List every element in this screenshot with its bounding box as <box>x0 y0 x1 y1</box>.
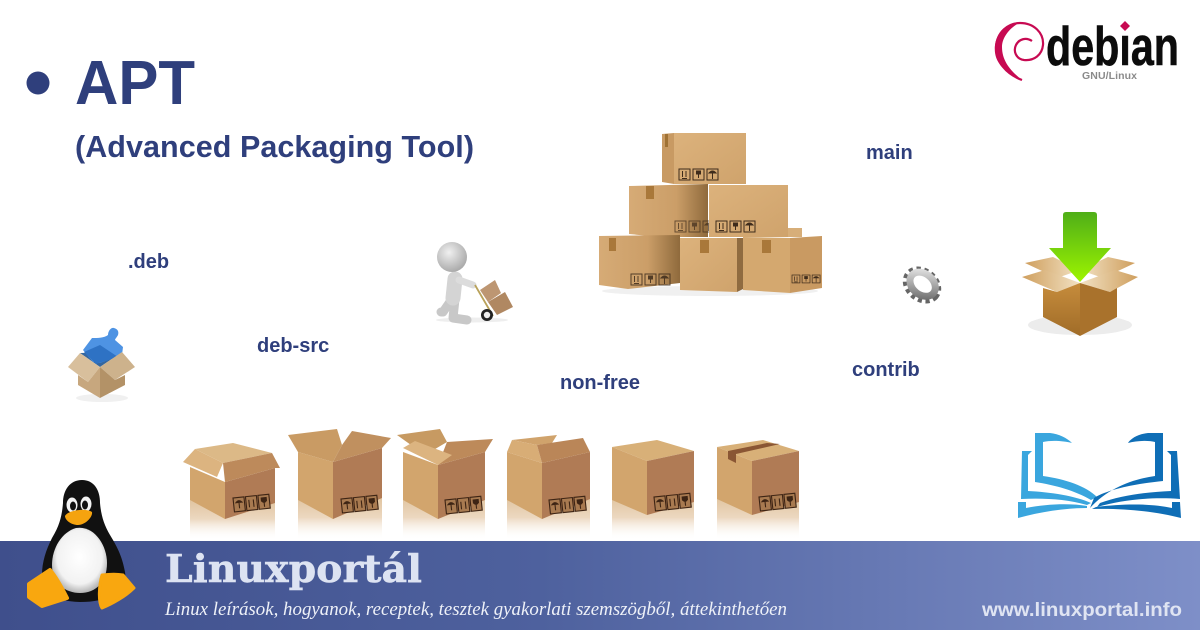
open cardboard boxes row <box>183 429 799 540</box>
book right <box>1090 433 1181 518</box>
box: bottom middle <box>680 238 743 292</box>
icon: gear <box>899 263 945 307</box>
box: bottom right <box>743 236 822 293</box>
box: middle left <box>629 184 714 237</box>
footer url: www.linuxportal.info <box>981 600 1182 621</box>
icon: stack of boxes <box>599 133 822 296</box>
label: non-free: non-free <box>560 372 640 394</box>
bullet point <box>26 72 50 94</box>
box: middle right <box>709 185 788 237</box>
label: main: main <box>866 142 913 164</box>
title: APT: APT <box>75 49 195 118</box>
icon: blue puzzle piece in box <box>68 328 135 402</box>
box 4: half open <box>507 435 590 540</box>
box 6: taped <box>717 440 799 540</box>
footer title: Linuxportál <box>165 546 422 591</box>
box: top <box>662 133 746 184</box>
box 3: open <box>397 429 493 540</box>
box: bottom left <box>599 235 680 289</box>
icon: box with green download arrow <box>1022 212 1138 336</box>
book left <box>1018 433 1097 518</box>
box 2: open <box>288 429 391 540</box>
label: contrib: contrib <box>852 359 920 381</box>
icon: Tux penguin <box>29 480 134 608</box>
icon: man with hand truck <box>436 242 513 322</box>
box: small behind <box>788 228 802 237</box>
box 5: closed <box>612 440 694 540</box>
logo: debian <box>995 15 1179 82</box>
label: deb-src: deb-src <box>257 335 329 357</box>
icon: open book <box>1018 433 1181 518</box>
logo: debian: GNU/Linux <box>1082 70 1137 82</box>
label: .deb: .deb <box>128 251 169 273</box>
subtitle: Advanced Packaging Tool: (Advanced Packaging Tool) <box>75 130 474 164</box>
footer tagline: Linux leírások, hogyanok, receptek, tesztek gyakorlati szemszögből, áttekinthetően <box>164 599 787 620</box>
box 1: open <box>183 443 280 540</box>
footer banner <box>0 541 1200 630</box>
